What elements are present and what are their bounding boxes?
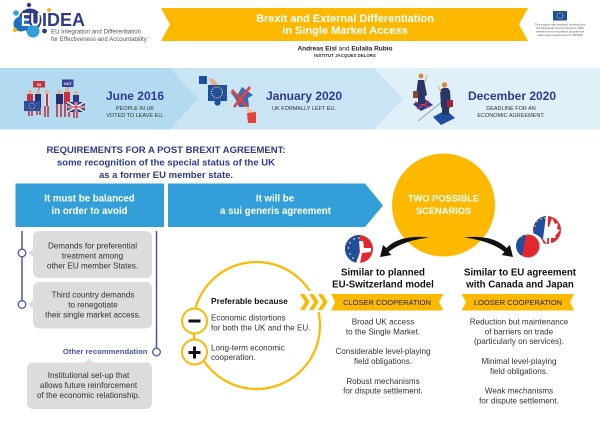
callout: preferential treatment: Demands for preferential (48, 242, 137, 250)
text: closer cooperation details: field obligations. (354, 357, 412, 366)
callout: institutional set-up: allows future reinforcement (40, 381, 138, 390)
callout: third country demands: Third country demands (52, 290, 134, 300)
text: looser cooperation details: Weak mechanisms (485, 386, 553, 396)
ring: preferable because: Long-term economic (211, 344, 285, 352)
icon: puzzle hands (199, 76, 256, 123)
ribbon: looser cooperation: LOOSER COOPERATION (474, 298, 562, 307)
title ribbon: in Single Market Access (282, 25, 408, 37)
circle: two possible scenarios (392, 154, 495, 256)
heading: Canada and Japan scenario: Similar to EU agreement (464, 268, 577, 278)
text: looser cooperation details: (particularly on services). (474, 337, 564, 346)
text: closer cooperation details: Broad UK access (352, 318, 414, 326)
text: closer cooperation details: Robust mechanisms (346, 377, 420, 386)
EU funding note (535, 11, 586, 37)
authors: INSTITUT JACQUES DELORS (314, 53, 376, 58)
chevrons (300, 294, 328, 310)
circle: two possible scenarios: SCENARIOS (416, 206, 471, 216)
EU funding note: This project has received funding from (535, 22, 586, 26)
text: looser cooperation details: Minimal level-playing (481, 357, 557, 366)
text: June 2016 (106, 89, 164, 119)
text: June 2016: PEOPLE IN UK (116, 106, 154, 112)
callout: institutional set-up (27, 358, 152, 409)
text: looser cooperation details: of barriers on trade (485, 328, 554, 336)
heading: requirements: REQUIREMENTS FOR A POST BREXIT AGREEMENT: (46, 145, 286, 156)
icon: crowd with in/out signs: IN (37, 83, 41, 87)
icon: plus (182, 340, 207, 364)
text: December 2020: DEADLINE FOR AN (486, 106, 536, 112)
EU funding note: the European Union's Horizon 2020 (536, 26, 584, 30)
authors: Andreas Eisl and Eulalia Rubio (297, 46, 393, 52)
ring: preferable because (193, 262, 331, 389)
text: June 2016: June 2016 (106, 89, 164, 103)
arrow: to Canada and Japan scenario (464, 237, 513, 257)
callout: preferential treatment: treatment among (62, 252, 123, 260)
logo: EUIDEA: EU (21, 10, 40, 30)
icon: businessmen on flags (413, 74, 455, 125)
heading: Canada and Japan scenario: with Canada and Japan (465, 280, 574, 290)
text: closer cooperation details: to the Single Market. (346, 328, 420, 336)
text: December 2020: ECONOMIC AGREEMENT. (477, 113, 545, 119)
heading: requirements (46, 145, 286, 181)
icon: crowd with in/out signs: OUT (64, 82, 72, 86)
ring: preferable because: Preferable because (211, 296, 288, 306)
EU funding note: research and innovation programme (536, 30, 584, 34)
arrow: to Switzerland scenario (380, 237, 429, 257)
heading: requirements: as a former EU member state. (99, 170, 233, 181)
callout: third country demands (28, 282, 152, 328)
text: looser cooperation details: field obligations. (490, 367, 548, 376)
text: January 2020 (266, 89, 342, 112)
text: closer cooperation details: for dispute settlement. (343, 386, 423, 396)
icon: minus (182, 308, 207, 334)
box: it must be balanced: in order to avoid (52, 206, 128, 217)
logo: EUIDEA: IDEA (42, 10, 85, 30)
arrow box: sui generis: a sui generis agreement (220, 206, 332, 217)
arrow box: sui generis: It will be (256, 194, 295, 204)
heading: Switzerland scenario: Similar to planned (341, 268, 425, 278)
ring: preferable because: for both the UK and the EU. (211, 324, 310, 332)
timeline: right (153, 231, 160, 356)
text: December 2020: December 2020 (468, 89, 556, 103)
circle: two possible scenarios: TWO POSSIBLE (408, 194, 479, 204)
heading: Canada and Japan scenario (464, 268, 577, 290)
ribbon: looser cooperation (462, 294, 574, 310)
EU funding note: under grant agreement N° 822622 (537, 33, 583, 37)
icon: EU-Switzerland flag (345, 235, 373, 263)
text: looser cooperation details (470, 318, 569, 406)
heading: Switzerland scenario (332, 268, 434, 290)
title ribbon (161, 8, 528, 41)
heading: requirements: some recognition of the special status of the UK (57, 158, 275, 168)
text: January 2020: January 2020 (266, 89, 342, 103)
text: December 2020 (468, 89, 556, 119)
ribbon: closer cooperation (331, 294, 444, 310)
text: looser cooperation details: for dispute settlement. (479, 396, 559, 406)
logo: EUIDEA: for Effectiveness and Accountability (51, 36, 148, 43)
text: closer cooperation details: Considerable level-playing (336, 347, 430, 356)
title ribbon: Brexit and External Differentiation (256, 13, 434, 25)
timeline banner (0, 68, 600, 130)
callout: preferential treatment: other EU member States. (47, 262, 138, 270)
callout: preferential treatment (28, 231, 152, 278)
label: other recommendation: Other recommendation (63, 347, 148, 356)
callout: third country demands: their single market access. (45, 310, 141, 320)
ring: preferable because: cooperation. (211, 353, 256, 362)
callout: third country demands: to renegotiate (68, 300, 118, 310)
logo: EUIDEA: EU Integration and Differentiation (51, 28, 141, 36)
icon: crowd with in/out signs (24, 80, 85, 118)
callout: institutional set-up: Institutional set-up that (48, 371, 130, 380)
text: January 2020: UK FORMALLY LEFT EU. (272, 106, 336, 112)
text: looser cooperation details: Reduction but maintenance (470, 318, 569, 326)
icon: EU-Canada flag (533, 216, 561, 244)
box: it must be balanced (16, 184, 164, 227)
ring: preferable because: Economic distortions (211, 314, 286, 322)
heading: Switzerland scenario: EU-Switzerland model (332, 280, 434, 290)
box: it must be balanced: It must be balanced (44, 194, 135, 204)
authors (297, 46, 393, 58)
text: closer cooperation details (336, 318, 430, 396)
logo: EUIDEA (13, 3, 148, 43)
arrow box: sui generis (168, 184, 383, 227)
callout: institutional set-up: of the economic relationship. (37, 391, 140, 400)
text: June 2016: VOTED TO LEAVE EU. (106, 113, 164, 119)
ribbon: closer cooperation: CLOSER COOPERATION (343, 298, 431, 307)
icon: EU-Japan flag (516, 233, 544, 261)
timeline: left (18, 231, 26, 308)
